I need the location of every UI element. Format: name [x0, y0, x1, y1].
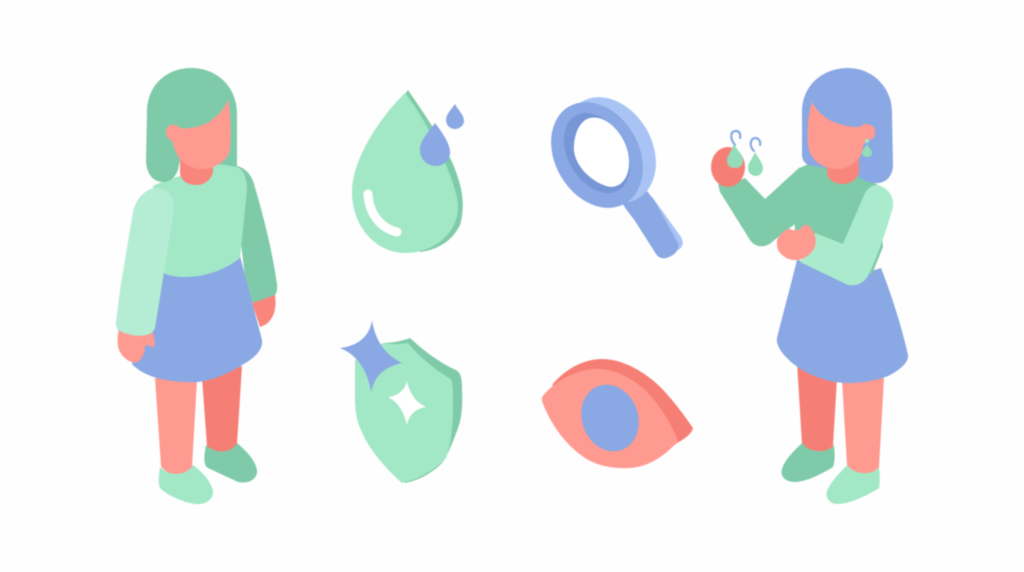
torso: [793, 163, 883, 274]
lens rim front: [533, 86, 661, 224]
drop side: [405, 90, 463, 252]
hair: [802, 68, 893, 183]
skirt: [777, 260, 908, 383]
front leg: [842, 378, 884, 474]
back leg: [202, 366, 242, 453]
handle front: [618, 182, 678, 258]
blue sparkle: [340, 320, 402, 392]
drop highlight: [368, 194, 397, 232]
torso: [153, 164, 247, 277]
lens opening: [574, 118, 629, 187]
back shoe: [782, 443, 835, 482]
raised hand: [711, 147, 745, 187]
figure: left woman: [116, 68, 277, 504]
back shoe: [204, 443, 257, 482]
lens inner wall: [550, 101, 644, 205]
hair: [146, 68, 237, 182]
neck: [827, 155, 859, 184]
neck: [180, 155, 213, 185]
handle side: [640, 188, 683, 258]
figure: right woman: [711, 68, 908, 504]
shield front: [355, 343, 453, 483]
eye side: [552, 359, 693, 456]
small blue droplet: [446, 104, 464, 129]
back arm: [233, 165, 277, 303]
held earring one: [727, 131, 743, 168]
front hand: [777, 225, 816, 260]
front shoe: [159, 465, 213, 504]
drop front: [352, 93, 458, 253]
large blue droplet: [420, 123, 450, 166]
front shoe: [826, 465, 880, 504]
front leg: [155, 378, 197, 474]
icon: shield with sparkles: [340, 320, 462, 483]
front hand: [118, 330, 155, 362]
white sparkle: [388, 381, 426, 425]
back arm: [718, 167, 800, 246]
held earring two: [748, 138, 763, 176]
ear earring: [862, 139, 872, 157]
shield side: [383, 338, 462, 483]
front arm: [116, 188, 174, 337]
icon: water drop: [352, 90, 464, 253]
icon: magnifying glass: [533, 81, 683, 258]
pupil: [572, 376, 648, 460]
eye front: [542, 369, 678, 468]
icon: eye: [542, 359, 693, 468]
face: [166, 100, 231, 169]
face: [808, 102, 875, 169]
front arm: [800, 185, 893, 285]
skirt: [132, 256, 262, 382]
back hand: [252, 295, 276, 327]
back leg: [797, 362, 837, 452]
lens rim back: [546, 81, 674, 219]
